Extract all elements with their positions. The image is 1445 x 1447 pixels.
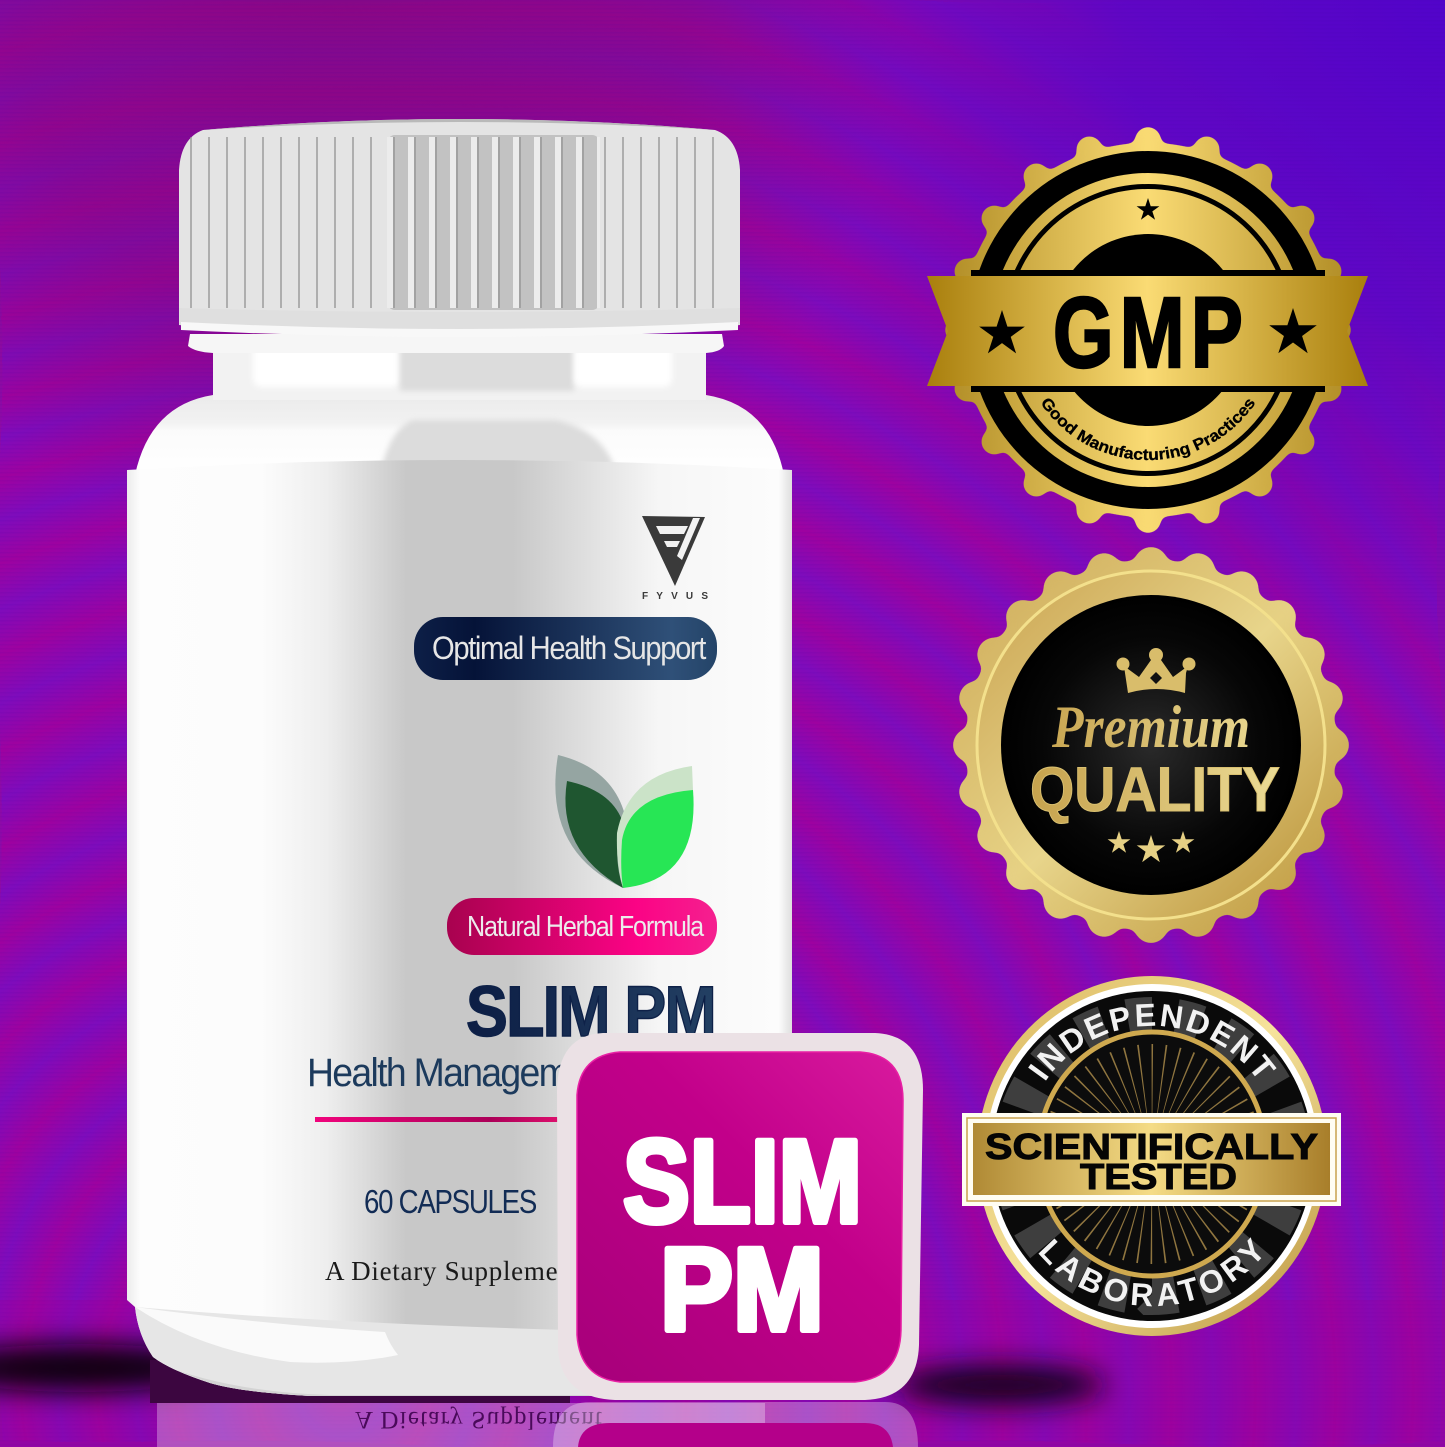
gmp ribbon text: GMP <box>1053 277 1249 389</box>
dietary supplement note: A Dietary Supplement <box>325 1256 580 1286</box>
bottle body <box>127 460 792 1396</box>
lab banner <box>962 1113 1341 1206</box>
gmp stars <box>979 198 1317 353</box>
cap <box>179 119 740 337</box>
badge: scientifically tested <box>962 976 1341 1336</box>
pill: optimal health support <box>414 617 717 680</box>
pill: optimal health support: Optimal Health Support <box>432 630 706 666</box>
leaf logo <box>555 755 694 888</box>
bottle base <box>135 1307 640 1396</box>
bottle reflection <box>157 1402 918 1447</box>
slim pm square callout: PM <box>660 1224 824 1356</box>
capsule count: 60 CAPSULES <box>364 1183 536 1220</box>
lab sunburst <box>1092 1094 1212 1214</box>
gmp ribbon <box>927 276 1368 386</box>
gmp curved caption: Good Manufacturing Practices <box>1042 398 1254 460</box>
brand logo: FYVUS <box>642 591 708 602</box>
label divider <box>315 1117 565 1122</box>
lab banner: SCIENTIFICALLY <box>985 1126 1318 1167</box>
floor shadow <box>0 1344 1105 1405</box>
label subtitle: Health Management <box>307 1051 617 1095</box>
lab bottom arc text: LABORATORY <box>1038 1237 1262 1306</box>
premium scalloped seal <box>966 560 1336 930</box>
brand logo <box>642 516 708 602</box>
badge: premium quality <box>966 560 1336 930</box>
pill: natural herbal formula <box>447 898 717 955</box>
bottle neck <box>188 334 724 400</box>
quality word: QUALITY <box>1030 755 1280 825</box>
bottle <box>127 119 792 1396</box>
lab ring segments <box>1014 1018 1290 1294</box>
premium script word: Premium <box>1051 694 1250 760</box>
lab banner: TESTED <box>1080 1156 1237 1197</box>
premium crown <box>1116 648 1196 693</box>
bottle reflection: A Dietary Supplement <box>355 1406 602 1433</box>
product name on label: SLIM PM <box>466 973 715 1052</box>
slim pm square callout: SLIM <box>623 1116 862 1248</box>
gmp scalloped seal <box>958 140 1338 520</box>
pill: natural herbal formula: Natural Herbal Formula <box>467 911 705 943</box>
lab top arc text: INDEPENDENT <box>1028 1004 1276 1080</box>
badge: GMP <box>927 127 1368 533</box>
slim pm square callout <box>557 1033 923 1400</box>
premium stars <box>1108 831 1194 862</box>
bottle shoulder <box>135 395 784 475</box>
